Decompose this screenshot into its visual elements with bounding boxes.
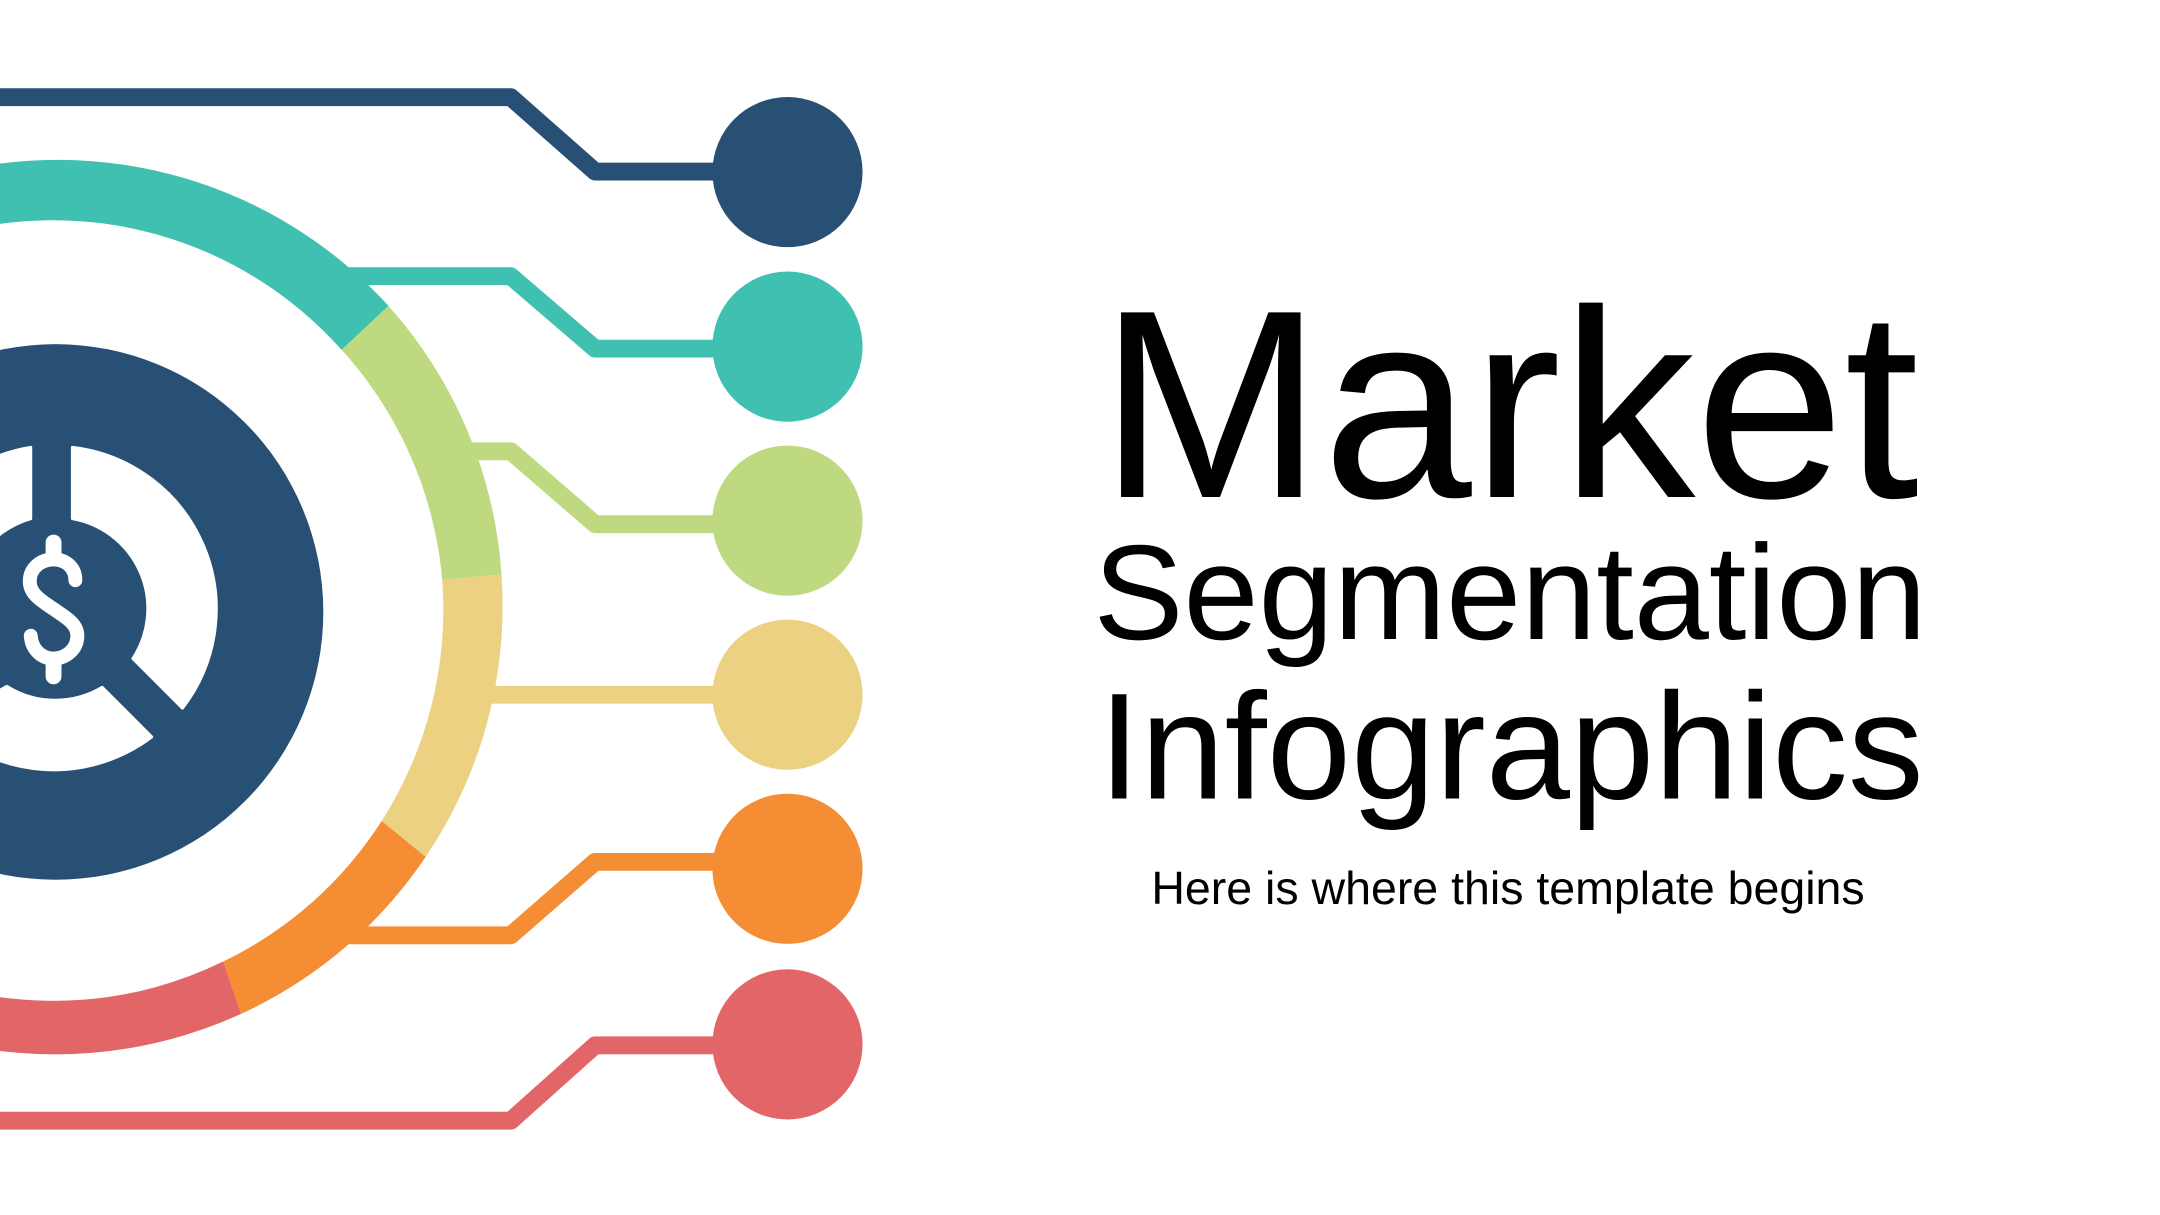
ring segment: yellow — [382, 574, 503, 857]
ring segment: red — [0, 962, 241, 1054]
node: green circle — [712, 446, 863, 596]
connector: green line — [466, 451, 754, 524]
icon: dollar symbol — [30, 543, 77, 676]
node: red circle — [712, 969, 863, 1119]
node: navy circle — [712, 97, 863, 247]
node: orange circle — [712, 794, 863, 944]
wheel disc — [0, 344, 323, 880]
wheel cut-out: right sector — [72, 447, 216, 708]
connector: red line — [0, 1045, 754, 1121]
title: Segmentation: Segmentation — [1093, 517, 1927, 668]
title: Market: Market — [1099, 254, 1920, 554]
ring segment: green — [342, 306, 501, 580]
node: yellow circle — [712, 620, 863, 770]
title: Infographics: Infographics — [1098, 662, 1924, 832]
connector: navy line — [0, 97, 754, 172]
node: teal circle — [712, 272, 863, 422]
ring segment: orange — [223, 821, 426, 1014]
icon: market segmentation dollar wheel — [0, 344, 323, 880]
wheel cut-out: bottom sector — [0, 686, 152, 770]
connector: yellow line — [476, 686, 754, 704]
connector: teal line — [337, 276, 754, 349]
ring segment: teal — [0, 160, 388, 350]
diagram: rings, connectors and nodes — [0, 97, 863, 1121]
subtitle: Here is where this template begins — [1151, 862, 1865, 914]
wheel cut-out: upper left sector — [0, 447, 31, 555]
connector: orange line — [337, 862, 754, 935]
